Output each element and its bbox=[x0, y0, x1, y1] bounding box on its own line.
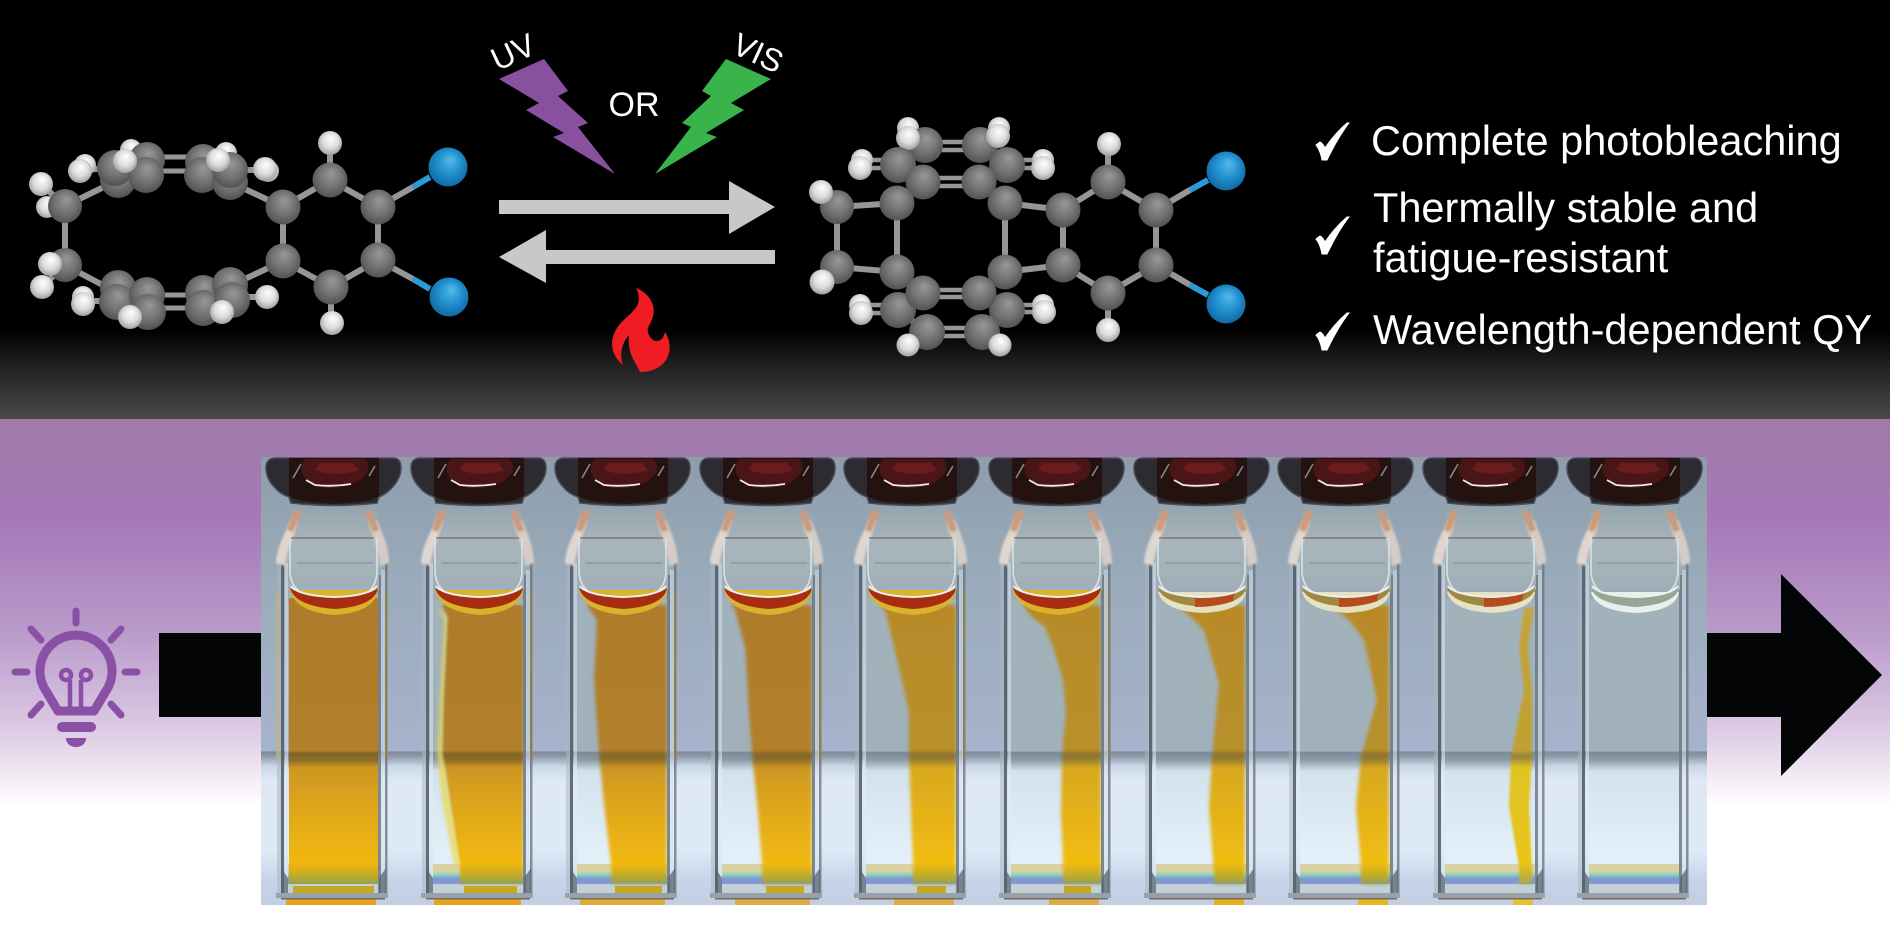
text: thermally stable and fatigue-resistant: Thermally stable and bbox=[1373, 184, 1758, 231]
label: OR: OR bbox=[608, 86, 660, 124]
lightning bolt: UV bbox=[499, 59, 615, 174]
text: complete photobleaching: Complete photobleaching bbox=[1371, 117, 1842, 164]
label: VIS: VIS bbox=[727, 26, 789, 80]
cuvette 10: bleached bbox=[1562, 457, 1707, 905]
bottom purple gradient panel bbox=[0, 419, 1890, 805]
cuvette 5 bbox=[839, 457, 984, 905]
arrow: black input bar bbox=[159, 633, 261, 717]
arrow: forward bbox=[499, 181, 775, 234]
icon: light bulb bbox=[15, 611, 137, 747]
cuvette 8 bbox=[1273, 457, 1418, 905]
arrow: reverse bbox=[499, 230, 775, 283]
photo strip: cuvette time series bbox=[261, 457, 1707, 905]
arrow: black output bbox=[1707, 574, 1882, 776]
molecule: open form bbox=[29, 131, 468, 335]
cuvette 2 bbox=[406, 457, 551, 905]
label: UV: UV bbox=[485, 26, 541, 78]
cuvette 3 bbox=[550, 457, 695, 905]
icon: flame bbox=[612, 288, 670, 372]
cuvette 7 bbox=[1129, 457, 1274, 905]
icon: check 2 bbox=[1316, 217, 1349, 254]
cuvette 9 bbox=[1418, 457, 1563, 905]
cuvette 4 bbox=[695, 457, 840, 905]
text: thermally stable and fatigue-resistant: fatigue-resistant bbox=[1373, 234, 1669, 281]
cuvette 6 bbox=[984, 457, 1129, 905]
icon: check 3 bbox=[1316, 313, 1349, 350]
text: wavelength-dependent QY: Wavelength-dependent QY bbox=[1373, 306, 1872, 353]
feature list bbox=[1316, 117, 1872, 353]
molecule: closed form bbox=[809, 117, 1246, 356]
icon: check 1 bbox=[1316, 123, 1349, 160]
cuvette 1: full colour bbox=[261, 457, 406, 905]
top black panel bbox=[0, 0, 1890, 419]
lightning bolt: VIS bbox=[655, 59, 771, 174]
